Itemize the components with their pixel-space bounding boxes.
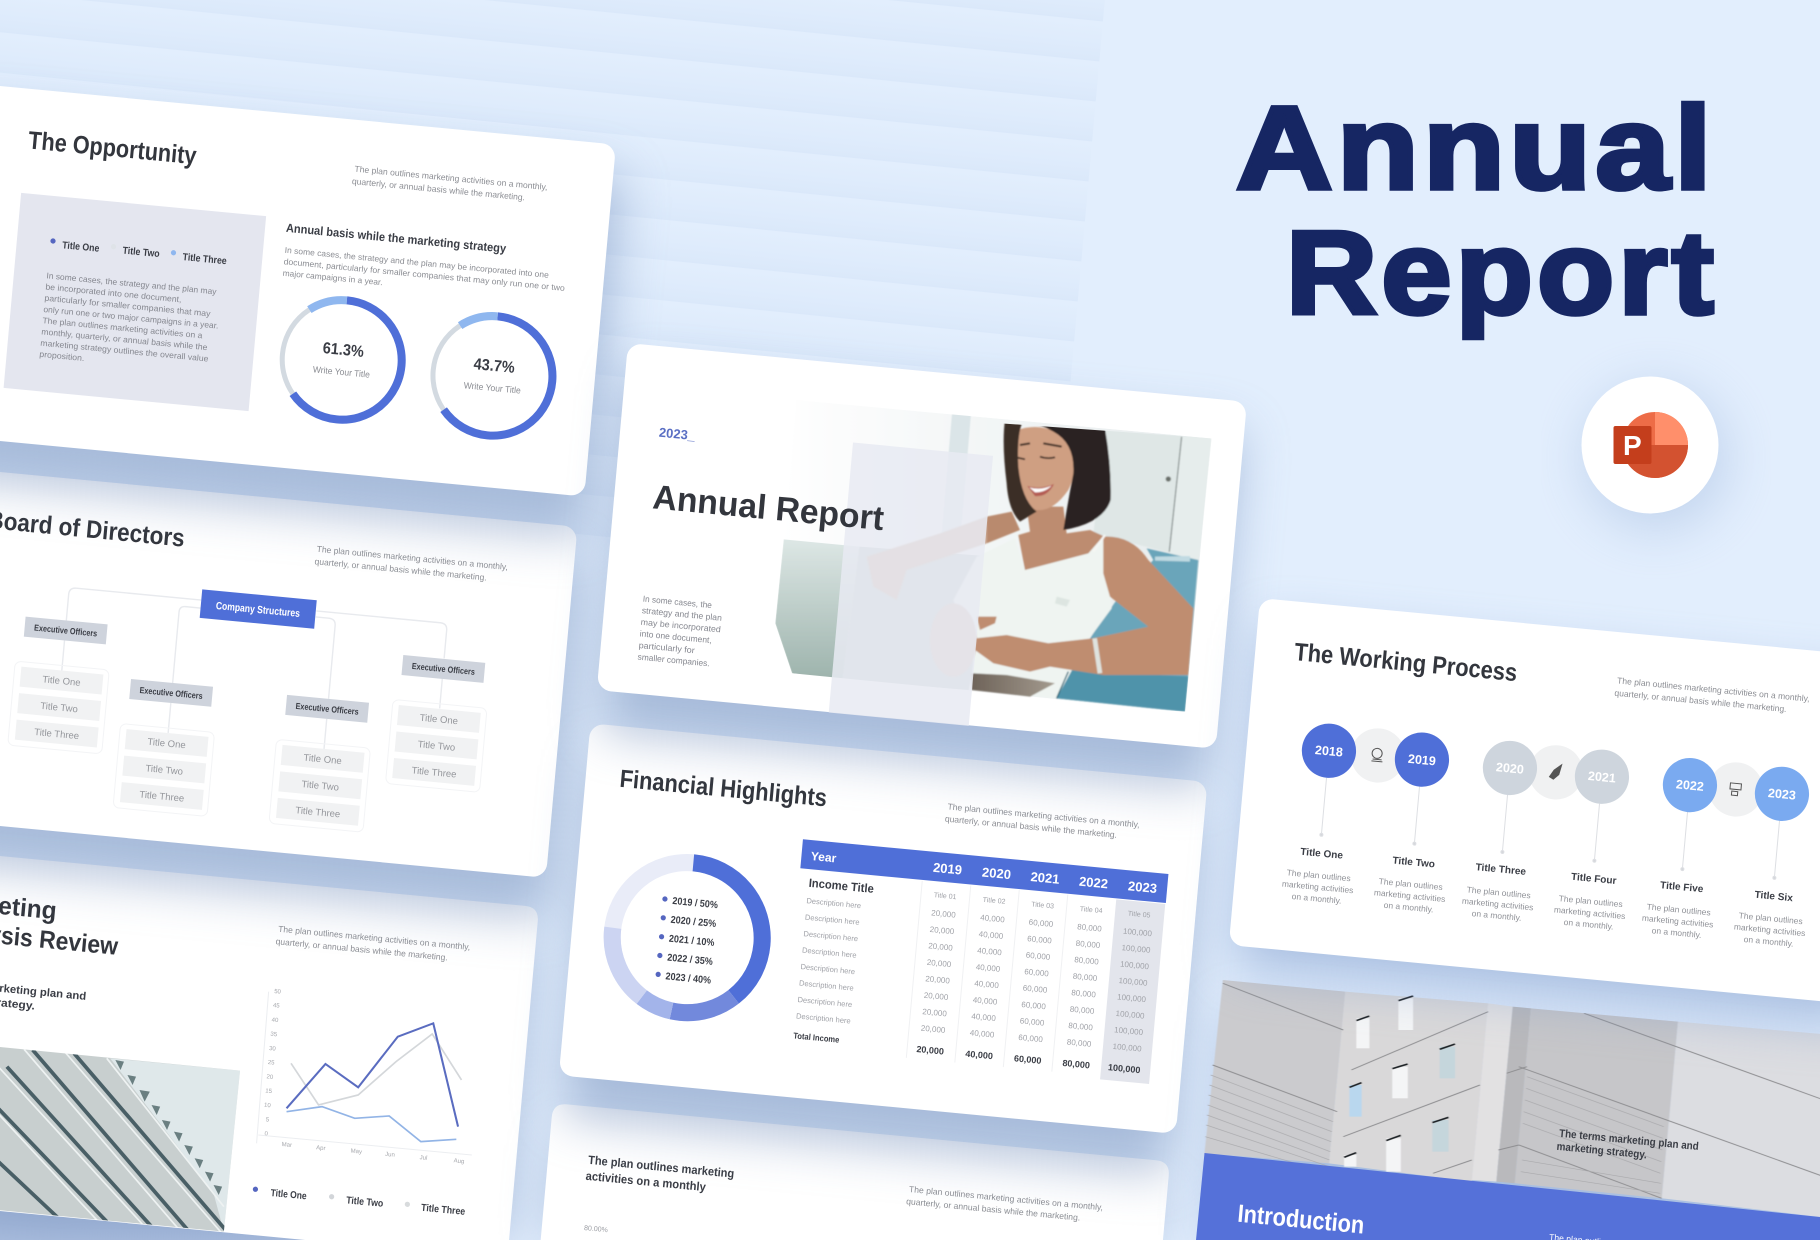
table values: 60,000 (1014, 1053, 1042, 1066)
panel: board of directors (0, 468, 585, 919)
photo: woman with laptop (775, 400, 1212, 712)
table values: 40,000 (971, 1012, 997, 1023)
icon: powerpoint badge (1582, 376, 1728, 530)
paragraph: major campaigns in a year. (282, 268, 383, 287)
chart axis labels: 30 (269, 1046, 277, 1053)
paragraph: document, particularly for smaller companies that may only run one or two (283, 256, 566, 293)
panel: the working process (1227, 598, 1820, 1027)
text: description: The plan outlines marketing activities on a monthly, (316, 544, 508, 572)
table header: 2023 (1127, 878, 1158, 896)
step descriptions: marketing activities (1462, 896, 1534, 912)
step descriptions: on a monthly. (1743, 934, 1794, 949)
heading: marketing analysis review (0, 886, 122, 961)
icon: money (1371, 748, 1384, 762)
icon: powerpoint badge: P (1623, 430, 1642, 461)
table values: Title 01 (933, 892, 957, 901)
heading: activities on a monthly (585, 1169, 707, 1194)
table header (800, 839, 1168, 903)
table header: 2021 (1030, 869, 1060, 887)
chart legend (252, 1186, 466, 1218)
line chart (257, 992, 472, 1155)
text: description (906, 1184, 1103, 1225)
heading: financial highlights: Financial Highlights (619, 765, 828, 812)
table values: 40,000 (977, 946, 1003, 957)
table values: 100,000 (1118, 976, 1148, 988)
paragraph: strategy and the plan (641, 605, 723, 623)
panel: bottom center slide (541, 1103, 1170, 1240)
text: description: quarterly, or annual basis while the marketing. (275, 936, 448, 963)
timeline pair: 2022 and 2023 (1661, 756, 1811, 823)
table values (916, 892, 1155, 1075)
step descriptions: on a monthly. (1383, 900, 1434, 914)
table values: 60,000 (1021, 1000, 1047, 1011)
chart legend: Title Two (346, 1195, 384, 1210)
step descriptions: on a monthly. (1651, 925, 1702, 940)
ring chart: 43.7%: 43.7% (473, 355, 516, 377)
step descriptions: on a monthly. (1291, 891, 1342, 906)
donut legend: 2022 / 35% (667, 953, 713, 968)
chart axis labels: 20 (266, 1074, 274, 1081)
step descriptions: marketing activities (1282, 879, 1354, 895)
step descriptions: on a monthly. (1471, 908, 1522, 923)
paragraph: The plan outlines marketing activities on a (42, 315, 203, 340)
heading (585, 1153, 735, 1197)
text: description: quarterly, or annual basis while the marketing. (314, 556, 487, 583)
table values: 80,000 (1069, 1005, 1095, 1016)
panel: the opportunity (0, 82, 622, 537)
table values: Title 04 (1079, 906, 1103, 915)
text: description: quarterly, or annual basis while the marketing. (906, 1196, 1081, 1223)
step descriptions: The plan outlines (1286, 867, 1351, 883)
row labels: Total Income (793, 1030, 840, 1045)
paragraph (39, 270, 222, 375)
table values: 100,000 (1115, 1009, 1145, 1021)
photo: office building (1204, 980, 1820, 1218)
table values: Title 05 (1127, 911, 1151, 920)
text: description (352, 164, 548, 204)
table values: 20,000 (925, 974, 951, 986)
org branch 4: Title Three (411, 765, 457, 781)
ring chart: 61.3%: Write Your Title (312, 364, 370, 380)
blue band (1196, 1153, 1820, 1240)
step titles: Title Five (1660, 880, 1704, 895)
table values: 80,000 (1074, 955, 1100, 967)
table values: 40,000 (969, 1028, 995, 1040)
table values: 100,000 (1114, 1025, 1144, 1037)
donut legend: 2021 / 10% (668, 934, 715, 949)
paragraph: In some cases, the strategy and the plan may be incorporated into one (284, 245, 550, 280)
legend: Title One (62, 240, 100, 255)
chart axis labels: 25 (268, 1060, 275, 1067)
step descriptions: on a monthly. (1563, 917, 1614, 932)
table values: 20,000 (931, 908, 957, 920)
paragraph: In some cases, the (642, 594, 713, 610)
org branch 3 (269, 694, 375, 832)
table header: Year (810, 849, 837, 865)
text: description: The plan outlines marketing activities on a monthly, (278, 924, 471, 952)
org branch 3: Title Three (295, 805, 341, 820)
chart legend: Title One (270, 1188, 307, 1202)
org branch 2: Executive Officers (139, 685, 203, 701)
text: description: The plan outlines marketing activities on a monthly, (909, 1184, 1103, 1212)
paragraph: marketing strategy outlines the overall value (40, 338, 209, 364)
org branch 1: Title Three (34, 727, 80, 742)
title: annual report (1236, 82, 1718, 340)
box: company structures (200, 589, 317, 629)
table values: 80,000 (1068, 1021, 1094, 1032)
title: annual report: Annual (1236, 82, 1716, 214)
timeline pair: 2018 and 2019: 2018 (1314, 743, 1343, 760)
paragraph: particularly for (638, 640, 695, 655)
table header: 2020 (981, 864, 1012, 882)
paragraph: In some cases, the strategy and the plan may (46, 270, 218, 297)
step titles: Title Three (1475, 862, 1527, 878)
table values: 60,000 (1019, 1016, 1045, 1028)
heading: The plan outlines marketing (588, 1153, 735, 1181)
table values: Title 02 (982, 897, 1006, 906)
table values: 100,000 (1117, 992, 1147, 1004)
chart axis labels (260, 989, 478, 1165)
paragraph (637, 594, 724, 669)
overlay panel (829, 443, 993, 726)
org branch 3: Title One (303, 753, 342, 767)
paragraph: into one document, (639, 628, 712, 645)
heading: annual report: Annual Report (651, 478, 886, 538)
donut legend (655, 895, 718, 987)
table (784, 839, 1168, 1084)
table values: 100,000 (1121, 943, 1151, 955)
step titles: Title Six (1754, 890, 1794, 904)
table values: 80,000 (1062, 1058, 1090, 1070)
row labels: Income Title (808, 876, 875, 896)
chart axis labels: 0 (264, 1131, 269, 1138)
donut legend: 2023 / 40% (665, 971, 712, 987)
paragraph (282, 245, 567, 304)
heading: the working process: The Working Process (1293, 638, 1518, 687)
text: description: quarterly, or annual basis while the marketing. (1614, 688, 1787, 714)
org branch 1 (8, 616, 113, 754)
table values: 20,000 (926, 958, 952, 969)
table header: 2022 (1078, 874, 1109, 891)
text: marketing plan note (0, 976, 87, 1017)
text: description (275, 924, 471, 965)
chart legend: Title Three (421, 1203, 466, 1218)
table values: 20,000 (920, 1024, 946, 1035)
row labels: Description here (802, 946, 857, 960)
chart axis labels: Mar (281, 1142, 292, 1149)
table values: Title 03 (1031, 901, 1054, 911)
step descriptions: The plan outlines (1646, 901, 1711, 918)
chart axis labels: May (350, 1149, 362, 1156)
chart axis labels: Jun (385, 1152, 395, 1159)
paragraph: may be incorporated (640, 617, 722, 634)
step descriptions: The plan outlines (1378, 876, 1443, 892)
chart axis labels: Aug (453, 1158, 465, 1165)
row labels: Description here (796, 1011, 851, 1026)
chart axis labels: 40 (271, 1017, 279, 1024)
org branch 2: Title Two (145, 763, 183, 778)
step titles: Title One (1300, 847, 1344, 862)
paragraph: proposition. (39, 349, 85, 363)
timeline pair: 2018 and 2019: 2019 (1407, 752, 1436, 768)
table values: 20,000 (923, 991, 949, 1002)
donut legend: 2019 / 50% (672, 896, 718, 911)
stems (1320, 778, 1781, 879)
text: description (314, 544, 508, 584)
table values: 20,000 (928, 941, 954, 953)
legend (50, 238, 228, 267)
table header: 2019 (932, 860, 963, 878)
subheading: Annual basis while the marketing strategy (285, 221, 507, 256)
panel: introduction (1196, 980, 1820, 1240)
table values: 40,000 (978, 930, 1004, 941)
table values: 60,000 (1024, 967, 1050, 978)
step descriptions: marketing activities (1554, 904, 1626, 921)
org chart connectors (57, 588, 447, 760)
table values: 80,000 (1077, 922, 1103, 934)
text: description: The plan outlines marketing activities on a monthly, (947, 801, 1140, 830)
row labels (793, 876, 875, 1047)
text: description: quarterly, or annual basis while the marketing. (352, 176, 525, 202)
table values: 40,000 (965, 1049, 993, 1061)
icon: rocket (1549, 764, 1562, 780)
step titles (1300, 845, 1794, 904)
step titles: Title Four (1571, 872, 1617, 887)
photo: building diagonal (0, 1043, 245, 1233)
paragraph: particularly for smaller companies that may (44, 293, 212, 319)
panel: marketing analysis review (0, 850, 539, 1240)
ring chart: 61.3%: 61.3% (322, 339, 365, 361)
grey info box (4, 193, 266, 411)
table values: 80,000 (1075, 939, 1101, 950)
row labels: Description here (799, 978, 854, 993)
table values: 20,000 (922, 1007, 948, 1018)
org branch 2 (113, 678, 219, 816)
paragraph: be incorporated into one document, (45, 282, 182, 304)
table values: 20,000 (916, 1044, 944, 1057)
chart axis labels: 50 (274, 989, 282, 996)
text: description: quarterly, or annual basis while the marketing. (945, 814, 1117, 840)
org branch 2: Title Three (139, 789, 185, 805)
paragraph: smaller companies. (637, 652, 710, 668)
step descriptions: The plan outlines (1558, 893, 1623, 909)
donut chart (606, 856, 769, 1019)
chart axis labels: 35 (270, 1032, 278, 1038)
text: marketing note: marketing strategy. (1556, 1141, 1647, 1161)
chart axis labels: 45 (273, 1003, 281, 1010)
step descriptions: marketing activities (1734, 921, 1806, 938)
table values: 100,000 (1108, 1062, 1141, 1075)
text: description: The plan outlines marketing activities on a monthly, (1617, 675, 1810, 704)
org branch 4 (385, 654, 491, 792)
chart axis labels: 5 (265, 1117, 270, 1124)
timeline pair: 2018 and 2019 (1300, 721, 1451, 789)
table values: 80,000 (1071, 988, 1097, 999)
org branch 2: Title One (147, 737, 186, 751)
text: description: The plan outlines marketing activities on a monthly, (354, 164, 548, 192)
table values: 40,000 (980, 913, 1006, 924)
step titles: Title Two (1392, 855, 1435, 870)
chart axis labels: 15 (265, 1088, 273, 1095)
ring chart: 61.3% (277, 295, 407, 425)
chart axis labels: Jul (419, 1155, 428, 1162)
table values: 60,000 (1025, 951, 1051, 962)
step descriptions: The plan outlines (1738, 910, 1803, 926)
text: description (1614, 675, 1810, 716)
title: annual report: Report (1286, 208, 1718, 340)
org branch 1: Executive Officers (34, 623, 98, 639)
table values: 40,000 (974, 979, 1000, 990)
timeline pair: 2022 and 2023: 2023 (1767, 786, 1796, 803)
org branch 3: Title Two (301, 779, 339, 794)
timeline pair: 2020 and 2021 (1481, 738, 1631, 806)
table values: 60,000 (1018, 1033, 1044, 1044)
timeline pair: 2020 and 2021: 2020 (1495, 760, 1524, 777)
table values: 20,000 (929, 925, 955, 936)
row labels: Description here (803, 929, 858, 943)
step descriptions: The plan outlines (1466, 884, 1531, 900)
table values: 80,000 (1066, 1038, 1092, 1049)
text: description (945, 801, 1140, 842)
ring chart: 43.7% (428, 311, 558, 441)
paragraph: only run one or two major campaigns in a year. (43, 304, 219, 331)
org branch 4: Executive Officers (411, 661, 475, 677)
row labels: Description here (805, 913, 860, 927)
legend: Title Three (182, 252, 227, 267)
org branch 1: Title Two (40, 701, 78, 715)
org branch 3: Executive Officers (295, 701, 359, 717)
box: company structures: Company Structures (215, 600, 301, 620)
table values: 40,000 (975, 962, 1001, 974)
chart axis labels: Apr (316, 1145, 326, 1152)
paragraph: monthly, quarterly, or annual basis while the (41, 326, 208, 352)
org branch 4: Title One (419, 713, 458, 727)
row labels: Description here (797, 995, 853, 1009)
org branch 1: Title One (42, 674, 81, 689)
timeline pair: 2020 and 2021: 2021 (1587, 769, 1616, 786)
step descriptions: marketing activities (1642, 913, 1714, 929)
label: year: 2023_ (658, 425, 696, 443)
legend: Title Two (122, 246, 160, 260)
text: marketing note: The terms marketing plan and (1559, 1128, 1699, 1153)
row labels: Description here (800, 962, 855, 976)
table values: 100,000 (1120, 960, 1150, 971)
table values: 100,000 (1123, 927, 1153, 938)
table values: 100,000 (1112, 1042, 1142, 1054)
row labels: Description here (806, 896, 861, 910)
step descriptions: marketing activities (1374, 887, 1446, 904)
panel: annual report cover (593, 343, 1247, 789)
step descriptions (1281, 867, 1807, 950)
text: marketing note (1556, 1128, 1699, 1166)
donut legend: 2020 / 25% (670, 915, 717, 930)
timeline pair: 2022 and 2023: 2022 (1675, 777, 1704, 794)
heading: the opportunity: The Opportunity (27, 126, 198, 170)
axis label: 80.00% (584, 1225, 608, 1234)
ring chart: 43.7%: Write Your Title (463, 380, 521, 396)
chart axis labels: 10 (264, 1103, 272, 1109)
table values: 60,000 (1022, 983, 1048, 995)
table values: 60,000 (1028, 918, 1054, 929)
org branch 4: Title Two (417, 739, 456, 754)
table values: 60,000 (1027, 934, 1053, 946)
panel: financial highlights (555, 723, 1208, 1174)
table values: 40,000 (972, 995, 998, 1007)
icon: monitors (1729, 783, 1741, 796)
table values: 80,000 (1072, 972, 1098, 983)
